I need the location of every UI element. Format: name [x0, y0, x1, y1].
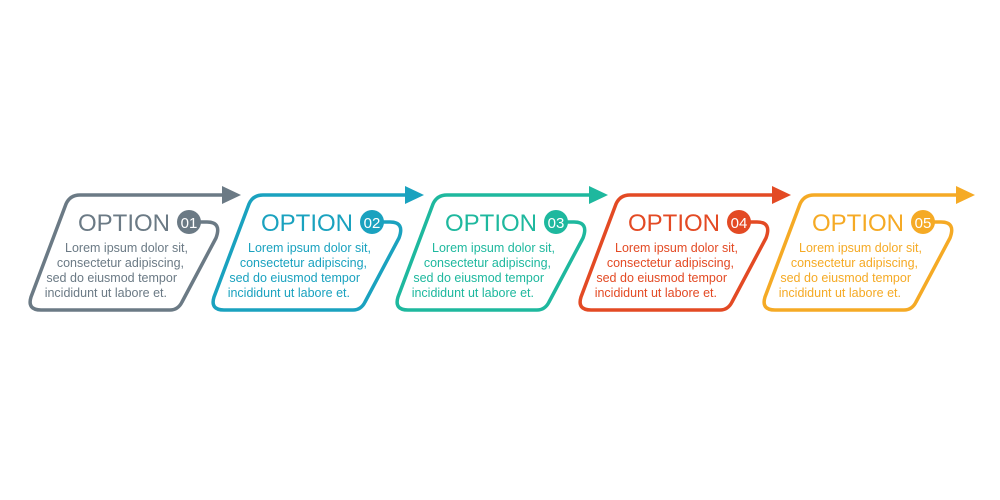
body text: Lorem ipsum dolor sit,	[248, 241, 371, 255]
number badge	[544, 210, 568, 234]
number badge	[177, 210, 201, 234]
panel: option 02	[213, 186, 424, 310]
number badge	[360, 210, 384, 234]
body text: consectetur adipiscing,	[607, 256, 734, 270]
number badge	[727, 210, 751, 234]
body text	[412, 241, 555, 300]
number badge: 01	[181, 215, 197, 232]
panel: option 03	[397, 186, 608, 310]
body text: incididunt ut labore et.	[228, 286, 350, 300]
arrowhead	[222, 186, 241, 204]
body text: sed do eiusmod tempor	[229, 271, 360, 285]
number badge	[911, 210, 935, 234]
body text: Lorem ipsum dolor sit,	[799, 241, 922, 255]
arrowhead	[772, 186, 791, 204]
body text	[779, 241, 922, 300]
body text: incididunt ut labore et.	[595, 286, 717, 300]
arrowhead	[405, 186, 424, 204]
heading: OPTION	[628, 210, 720, 237]
body text: consectetur adipiscing,	[57, 256, 184, 270]
body text: Lorem ipsum dolor sit,	[615, 241, 738, 255]
body text: sed do eiusmod tempor	[413, 271, 544, 285]
body text	[595, 241, 738, 300]
number badge: 03	[548, 215, 564, 232]
body text	[45, 241, 188, 300]
panel: option 01	[30, 186, 241, 310]
body text: incididunt ut labore et.	[779, 286, 901, 300]
number badge: 02	[364, 215, 380, 232]
body text	[228, 241, 371, 300]
body text: incididunt ut labore et.	[45, 286, 167, 300]
arrowhead	[956, 186, 975, 204]
body text: sed do eiusmod tempor	[780, 271, 911, 285]
body text: consectetur adipiscing,	[240, 256, 367, 270]
panel: option 04	[580, 186, 791, 310]
body text: consectetur adipiscing,	[791, 256, 918, 270]
number badge: 04	[731, 215, 747, 232]
body text: sed do eiusmod tempor	[46, 271, 177, 285]
body text: Lorem ipsum dolor sit,	[65, 241, 188, 255]
arrowhead	[589, 186, 608, 204]
panel: option 05	[764, 186, 975, 310]
body text: incididunt ut labore et.	[412, 286, 534, 300]
heading: OPTION	[78, 210, 170, 237]
heading: OPTION	[812, 210, 904, 237]
body text: sed do eiusmod tempor	[596, 271, 727, 285]
number badge: 05	[915, 215, 931, 232]
body text: consectetur adipiscing,	[424, 256, 551, 270]
body text: Lorem ipsum dolor sit,	[432, 241, 555, 255]
heading: OPTION	[261, 210, 353, 237]
heading: OPTION	[445, 210, 537, 237]
